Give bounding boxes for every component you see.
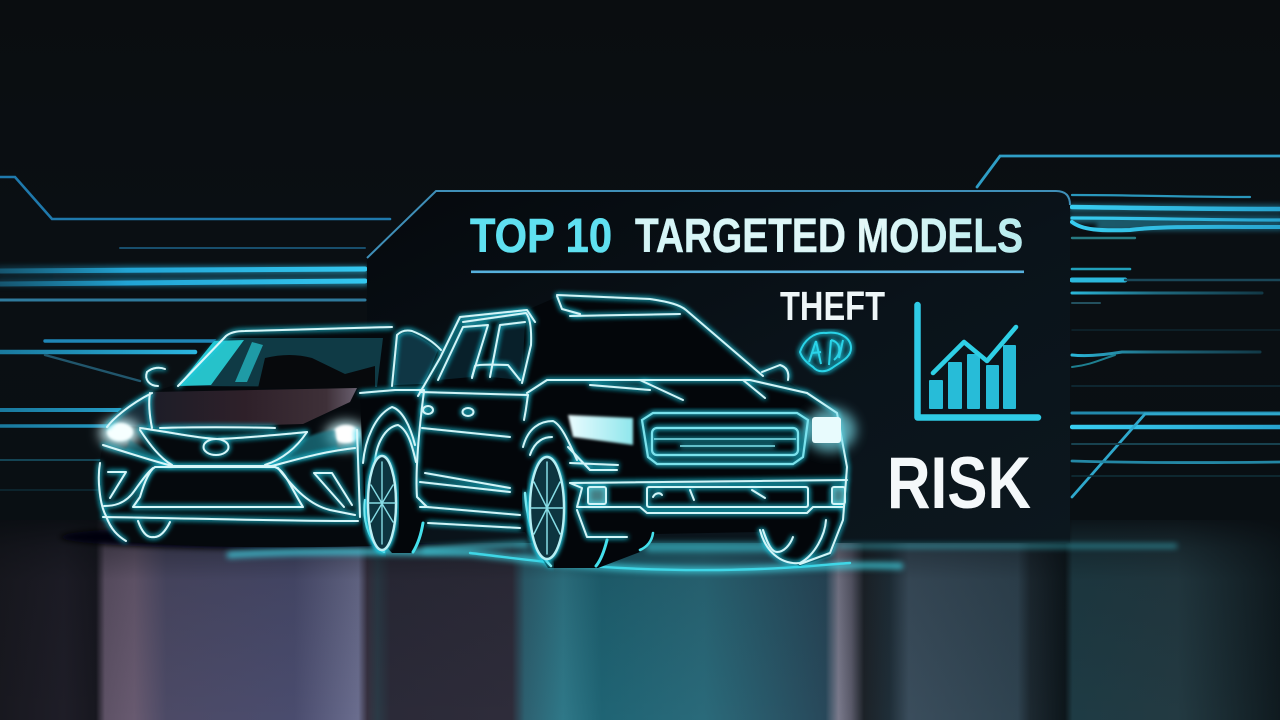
sedan windshield [178,338,383,387]
icon: bar chart with trend line [918,305,1038,418]
reflective floor [0,520,1280,720]
label: theft: THEFT [780,283,885,329]
pickup body [360,297,848,568]
pickup rear wheel [364,456,423,552]
right circuit lines [977,156,1280,497]
left circuit lines [0,177,390,490]
central dark panel [367,191,1070,543]
pickup front wheel [525,457,653,566]
title: targeted models: TARGETED MODELS [635,210,1023,263]
label: risk: RISK [887,443,1031,524]
title: top 10: TOP 10 [470,210,612,263]
pickup headlights [568,415,633,445]
sedan outlines [99,327,392,541]
pickup grille [642,413,808,464]
title underline [471,270,1024,273]
car: sedan [99,327,400,547]
sedan hood [152,388,357,428]
car: pickup truck [360,295,856,568]
icon: theft emblem [800,333,851,371]
pickup door window [394,332,438,385]
sedan headlight glow [100,419,140,447]
floor under-glow [230,544,1175,570]
pickup outlines [360,295,847,564]
sedan body [100,327,400,547]
